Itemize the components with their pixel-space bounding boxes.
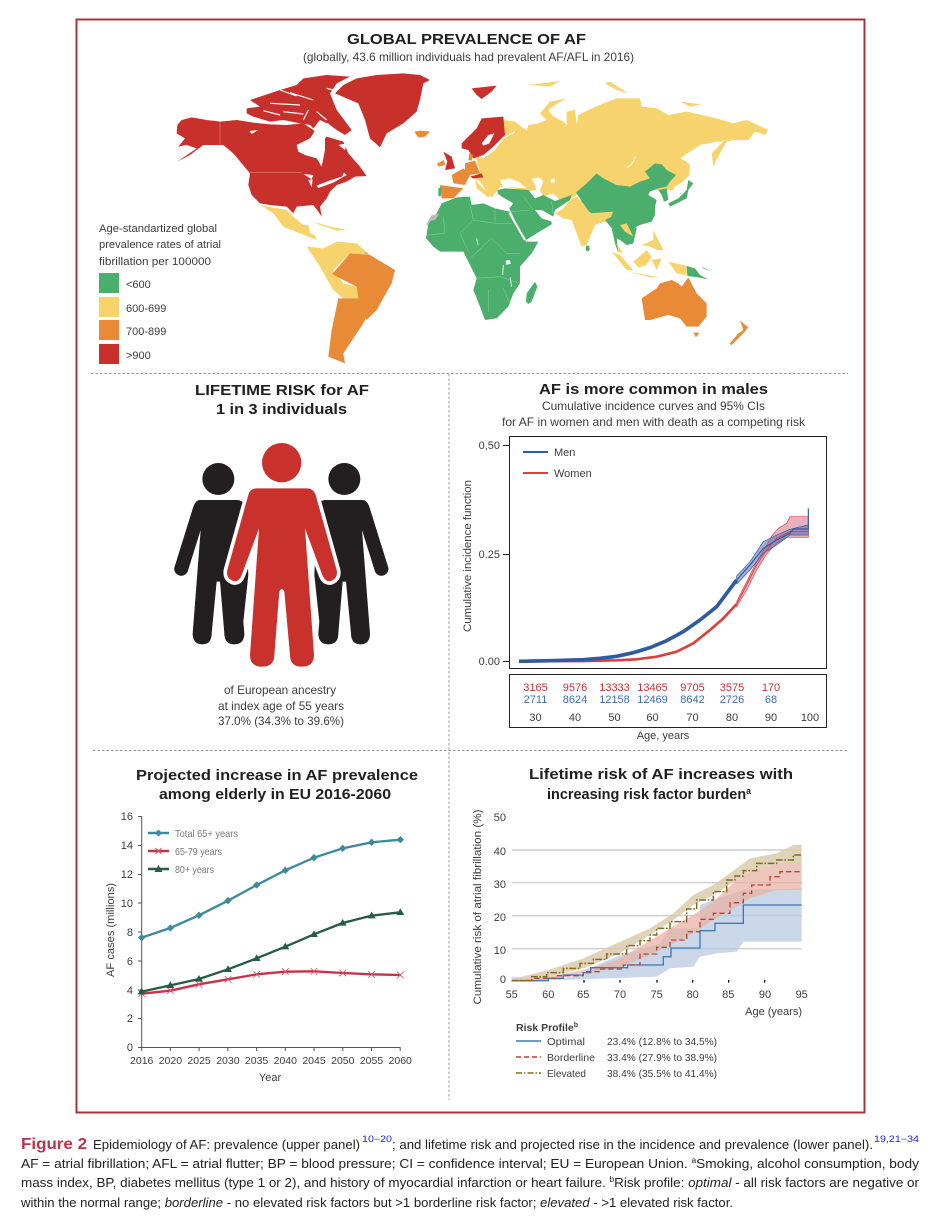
chart legend: Men [554, 447, 575, 459]
step chart: cumulative risk by age: 40 [494, 846, 506, 858]
step chart: cumulative risk by age: 60 [542, 989, 554, 1001]
numbers at risk table: 50 [608, 712, 621, 724]
step chart: cumulative risk by age: 85 [722, 989, 734, 1001]
lifetime risk heading: 1 in 3 individuals [216, 401, 347, 418]
step chart: cumulative risk by age: 20 [494, 912, 506, 924]
numbers at risk table: 8624 [563, 694, 587, 706]
numbers at risk table: 3575 [720, 682, 744, 694]
risk profile legend: Borderline [547, 1052, 595, 1064]
line chart: AF cases by year: 16 [121, 811, 133, 823]
map legend: 600-699 [126, 303, 166, 315]
males subtitle: for AF in women and men with death as a competing risk [502, 415, 806, 429]
line chart: AF cases by year: Year [259, 1072, 281, 1084]
figure caption: Figure 2 [21, 1136, 87, 1153]
panel: lifetime risk by risk factor burden [472, 766, 808, 1080]
risk profile legend: Optimal [547, 1036, 585, 1048]
numbers at risk table: 3165 [523, 682, 548, 694]
figure caption: Risk profile: [614, 1175, 688, 1190]
line chart: AF cases by year [105, 811, 412, 1084]
numbers at risk table: 70 [686, 712, 699, 724]
projection heading: among elderly in EU 2016-2060 [159, 786, 391, 803]
risk heading: increasing risk factor burden [547, 786, 754, 803]
numbers at risk table: 12469 [637, 694, 668, 706]
figure caption: Smoking, alcohol consumption, body [696, 1156, 920, 1171]
numbers at risk table: 2711 [524, 694, 547, 706]
numbers at risk table [510, 674, 826, 742]
panel: lifetime risk [174, 382, 388, 728]
figure caption: 19,21−34 [874, 1134, 919, 1144]
line chart: AF cases by year: 10 [121, 898, 133, 910]
panel: projected increase in AF prevalence [105, 767, 418, 1084]
numbers at risk table: 9705 [680, 682, 705, 694]
line chart: AF cases by year: 14 [121, 840, 133, 852]
numbers at risk table: 40 [569, 712, 581, 724]
line chart: AF cases by year: 2025 [187, 1055, 211, 1067]
step chart: cumulative risk by age: 75 [651, 989, 663, 1001]
step chart: cumulative risk by age: 80 [687, 989, 699, 1001]
step chart: cumulative risk by age: 70 [614, 989, 626, 1001]
map legend: >900 [126, 350, 151, 362]
incidence curves [519, 508, 808, 661]
lifetime risk caption [218, 683, 344, 728]
step chart: cumulative risk by age: 0 [500, 974, 506, 986]
line chart: AF cases by year: 2060 [389, 1055, 412, 1067]
step chart: cumulative risk by age: Cumulative risk of atrial fibrillation (%) [472, 810, 484, 1004]
figure caption: 10−20 [362, 1134, 392, 1144]
map legend [99, 223, 221, 364]
line chart: AF cases by year: 2030 [216, 1055, 240, 1067]
step chart: cumulative risk by age: 55 [506, 989, 518, 1001]
figure caption: AF = atrial fibrillation; AFL = atrial flutter; BP = blood pressure; CI = confidence interval; EU = European Union. [21, 1156, 654, 1171]
projection heading [136, 767, 418, 803]
risk profile legend: Risk Profile [516, 1022, 574, 1034]
figure caption: a [691, 1156, 697, 1165]
world map: North America and Greenland [177, 73, 430, 240]
map legend: Age-standartized global [99, 223, 217, 235]
chart legend: Women [554, 468, 592, 480]
map subtitle: (globally, 43.6 million individuals had prevalent AF/AFL in 2016) [303, 50, 634, 64]
numbers at risk table: 100 [801, 712, 819, 724]
map legend: 700-899 [126, 326, 166, 338]
risk profile legend: Elevated [547, 1068, 586, 1080]
step chart: cumulative risk by age: 30 [494, 879, 506, 891]
projection heading: Projected increase in AF prevalence [136, 767, 418, 784]
chart legend [148, 828, 238, 876]
figure caption: optimal - all risk factors are negative or [688, 1175, 913, 1190]
step chart: cumulative risk by age [472, 810, 808, 1018]
numbers at risk table: 68 [765, 694, 777, 706]
lifetime risk heading: LIFETIME RISK for AF [195, 382, 369, 399]
map legend: prevalence rates of atrial [99, 239, 221, 251]
numbers at risk table: 60 [646, 712, 659, 724]
lifetime risk caption: 37.0% (34.3% to 39.6%) [218, 714, 344, 728]
line chart: AF cases by year: 2016 [130, 1055, 154, 1067]
map legend: fibrillation per 100000 [99, 256, 211, 268]
figure caption [20, 1134, 920, 1210]
figure caption: within the normal range; borderline - no elevated risk factors but >1 borderline risk factor; elevated - >1 elevated risk factor. [20, 1195, 733, 1210]
chart legend: 80+ years [175, 864, 214, 876]
line chart: AF cases by year: 12 [121, 869, 133, 881]
numbers at risk table: 8642 [680, 694, 705, 706]
figure frame [76, 20, 864, 1112]
lifetime risk caption: at index age of 55 years [218, 699, 344, 713]
figure caption: b [610, 1175, 615, 1184]
line chart: AF cases by year: 6 [127, 956, 133, 968]
line chart: AF cases by year: 2020 [159, 1055, 182, 1067]
step chart: cumulative risk by age: Age (years) [745, 1006, 802, 1018]
risk heading [529, 766, 793, 803]
cumulative incidence chart: 0,50 [479, 440, 500, 452]
risk profile legend [516, 1022, 717, 1080]
icon: three people, one in red [174, 443, 388, 667]
confidence bands [512, 845, 802, 982]
line chart: AF cases by year: 2055 [360, 1055, 383, 1067]
map legend: <600 [126, 279, 151, 291]
map title: GLOBAL PREVALENCE OF AF [347, 31, 586, 48]
numbers at risk table: 12158 [599, 694, 630, 706]
numbers at risk table: Age, years [637, 730, 690, 742]
line chart: AF cases by year: 0 [127, 1042, 133, 1054]
numbers at risk table: 80 [726, 712, 738, 724]
cumulative incidence chart [462, 436, 826, 668]
figure caption: mass index, BP, diabetes mellitus (type 1 or 2), and history of myocardial infarction or heart failure. [21, 1175, 587, 1190]
step chart: cumulative risk by age: 10 [494, 945, 506, 957]
world map: western Europe detail [437, 152, 492, 198]
cumulative incidence chart: Cumulative incidence function [462, 480, 474, 632]
risk heading: Lifetime risk of AF increases with [529, 766, 793, 783]
cumulative incidence chart: 0.00 [479, 656, 500, 668]
line chart: AF cases by year: 2045 [302, 1055, 326, 1067]
numbers at risk table: 9576 [563, 682, 587, 694]
world map: Eurasia [462, 81, 768, 232]
panel: AF more common in males [462, 381, 826, 742]
step chart: cumulative risk by age: 65 [577, 989, 589, 1001]
figure caption: Epidemiology of AF: prevalence (upper panel) [93, 1137, 360, 1152]
world map: South America [307, 242, 395, 363]
risk profile legend: 33.4% (27.9% to 38.9%) [607, 1052, 717, 1064]
males heading: AF is more common in males [539, 381, 768, 398]
males subtitle [502, 399, 806, 429]
line chart: AF cases by year: 2040 [274, 1055, 297, 1067]
risk profile legend: 23.4% (12.8% to 34.5%) [607, 1036, 717, 1048]
numbers at risk table: 13465 [637, 682, 668, 694]
step chart: cumulative risk by age: 95 [796, 989, 808, 1001]
figure caption: ; and lifetime risk and projected rise in the incidence and prevalence (lower panel). [392, 1137, 873, 1152]
cumulative incidence chart: 0.25 [479, 549, 500, 561]
line chart: AF cases by year: AF cases (millions) [105, 883, 117, 977]
risk heading: a [746, 786, 752, 796]
chart legend: Total 65+ years [175, 828, 238, 840]
step chart: cumulative risk by age: 90 [759, 989, 771, 1001]
line chart: AF cases by year: 8 [127, 927, 133, 939]
world map: Africa, Middle East, South Asia, Oceania [426, 188, 748, 345]
numbers at risk table: 170 [762, 682, 780, 694]
males subtitle: Cumulative incidence curves and 95% CIs [542, 399, 765, 413]
lifetime risk heading [195, 382, 369, 418]
chart legend: 65-79 years [175, 846, 222, 858]
chart legend [523, 447, 592, 480]
numbers at risk table: 30 [529, 712, 542, 724]
panel: global prevalence map [99, 31, 768, 364]
risk profile legend: b [574, 1022, 578, 1029]
numbers at risk table: 90 [765, 712, 777, 724]
line chart: AF cases by year: 4 [127, 985, 133, 997]
line chart: AF cases by year: 2035 [245, 1055, 268, 1067]
series lines [138, 836, 404, 997]
risk profile legend: 38.4% (35.5% to 41.4%) [607, 1068, 717, 1080]
step chart: cumulative risk by age: 50 [494, 812, 506, 824]
lifetime risk caption: of European ancestry [224, 683, 336, 697]
numbers at risk table: 13333 [599, 682, 630, 694]
numbers at risk table: 2726 [720, 694, 744, 706]
line chart: AF cases by year: 2050 [331, 1055, 355, 1067]
line chart: AF cases by year: 2 [127, 1013, 133, 1025]
